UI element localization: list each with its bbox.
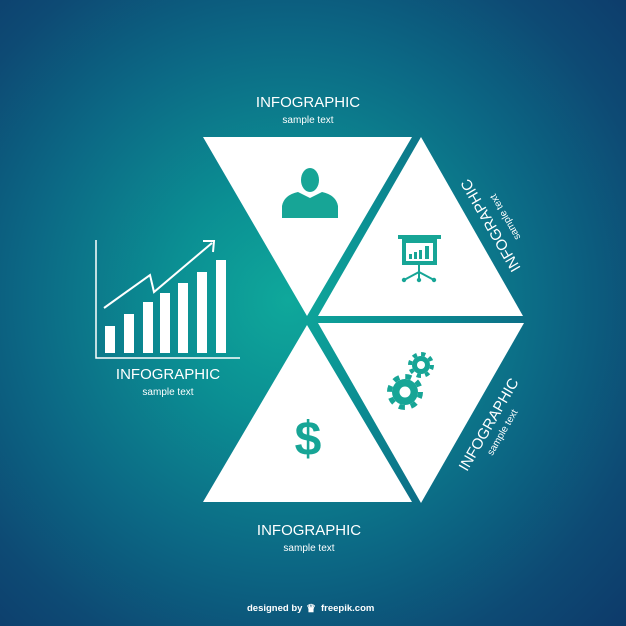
label: lower-right rotated: sample text [485, 408, 521, 458]
label: upper-right rotated: INFOGRAPHIC [458, 176, 525, 275]
text: bottom label: sample text [283, 543, 335, 554]
icon: presentation board [398, 235, 441, 282]
text: left label: INFOGRAPHIC [116, 366, 220, 383]
chart: bar chart [96, 240, 240, 358]
footer: credit: freepik.com [321, 603, 374, 614]
label: upper-right rotated: sample text [488, 192, 523, 242]
icon: dollar: $ [295, 413, 322, 466]
panel: top triangle [203, 137, 412, 316]
text: left label: sample text [142, 387, 194, 398]
panel: bottom triangle [203, 325, 412, 502]
text: bottom label [257, 522, 361, 554]
title: top [256, 94, 360, 126]
footer: credit: designed by [247, 603, 303, 614]
title: top: INFOGRAPHIC [256, 94, 360, 111]
panel: lower-right triangle [318, 323, 524, 503]
footer: credit [247, 603, 374, 615]
text: bottom label: INFOGRAPHIC [257, 522, 361, 539]
arrow: trend [104, 241, 214, 308]
icon: gears [390, 354, 432, 408]
label: lower-right rotated: INFOGRAPHIC [456, 375, 523, 474]
panel: upper-right triangle [318, 137, 523, 316]
title: top: sample text [282, 115, 334, 126]
text: left label [116, 366, 220, 398]
icon: person [282, 168, 338, 218]
footer: credit: ♛ [306, 603, 316, 615]
